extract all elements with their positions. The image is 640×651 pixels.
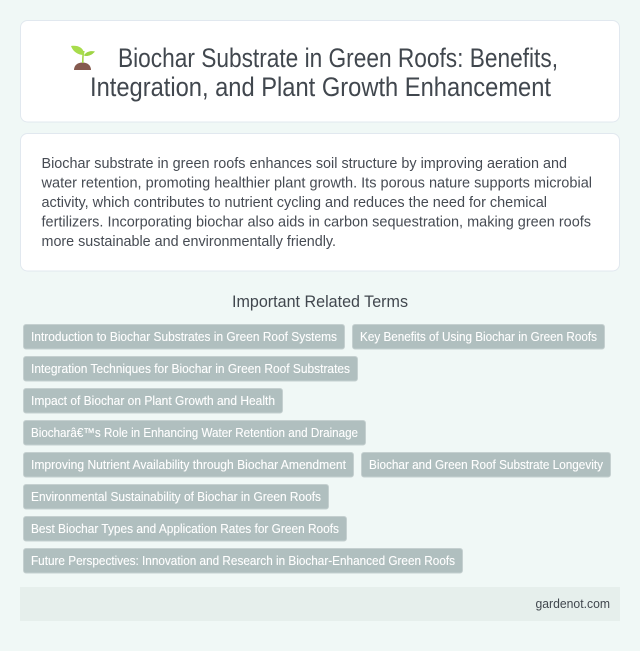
tag: Introduction to Biochar Substrates in Green Roof Systems bbox=[31, 330, 337, 344]
tag bbox=[24, 484, 328, 509]
tag: Key Benefits of Using Biochar in Green Roofs bbox=[360, 330, 597, 344]
text block: description: more sustainable and environmentally friendly. bbox=[42, 233, 336, 250]
panel: related term tags bbox=[24, 324, 610, 573]
heading: important related terms: Important Related Terms bbox=[232, 293, 408, 311]
tag bbox=[24, 388, 282, 413]
title: Integration, and Plant Growth Enhancement bbox=[90, 72, 552, 102]
title bbox=[90, 43, 558, 102]
text block: description bbox=[41, 155, 592, 250]
text block: description: water retention, promoting healthier plant growth. Its porous nature supports microbial bbox=[41, 174, 592, 192]
tag: Impact of Biochar on Plant Growth and Health bbox=[31, 394, 275, 408]
text block: description: Biochar substrate in green roofs enhances soil structure by improving aeration and bbox=[42, 155, 567, 172]
footer: gardenot.com bbox=[536, 596, 610, 611]
tag bbox=[24, 452, 354, 477]
panel: title card bbox=[20, 20, 620, 122]
tag bbox=[24, 356, 358, 381]
text block: description: activity, which contributes to nutrient cycling and reduces the need for chemical bbox=[42, 194, 547, 211]
text block: description: fertilizers. Incorporating biochar also aids in carbon sequestration, making green roofs bbox=[42, 214, 591, 230]
icon: sprout bbox=[71, 46, 95, 70]
tag: Biochar and Green Roof Substrate Longevity bbox=[369, 458, 604, 472]
tag bbox=[24, 420, 366, 445]
tag bbox=[24, 516, 346, 541]
tag bbox=[24, 548, 462, 573]
title: Biochar Substrate in Green Roofs: Benefits, bbox=[118, 43, 558, 73]
tag: Future Perspectives: Innovation and Research in Biochar-Enhanced Green Roofs bbox=[31, 554, 455, 568]
tag: Improving Nutrient Availability through Biochar Amendment bbox=[31, 458, 346, 472]
tag: Biocharâ€™s Role in Enhancing Water Retention and Drainage bbox=[31, 426, 358, 440]
panel: description card bbox=[20, 134, 620, 271]
tag bbox=[352, 324, 604, 349]
tag bbox=[362, 452, 610, 477]
footer bbox=[20, 587, 620, 621]
tag: Best Biochar Types and Application Rates for Green Roofs bbox=[31, 522, 339, 536]
tag: Integration Techniques for Biochar in Green Roof Substrates bbox=[31, 362, 350, 376]
tag: Environmental Sustainability of Biochar in Green Roofs bbox=[31, 490, 321, 504]
tag bbox=[24, 324, 344, 349]
